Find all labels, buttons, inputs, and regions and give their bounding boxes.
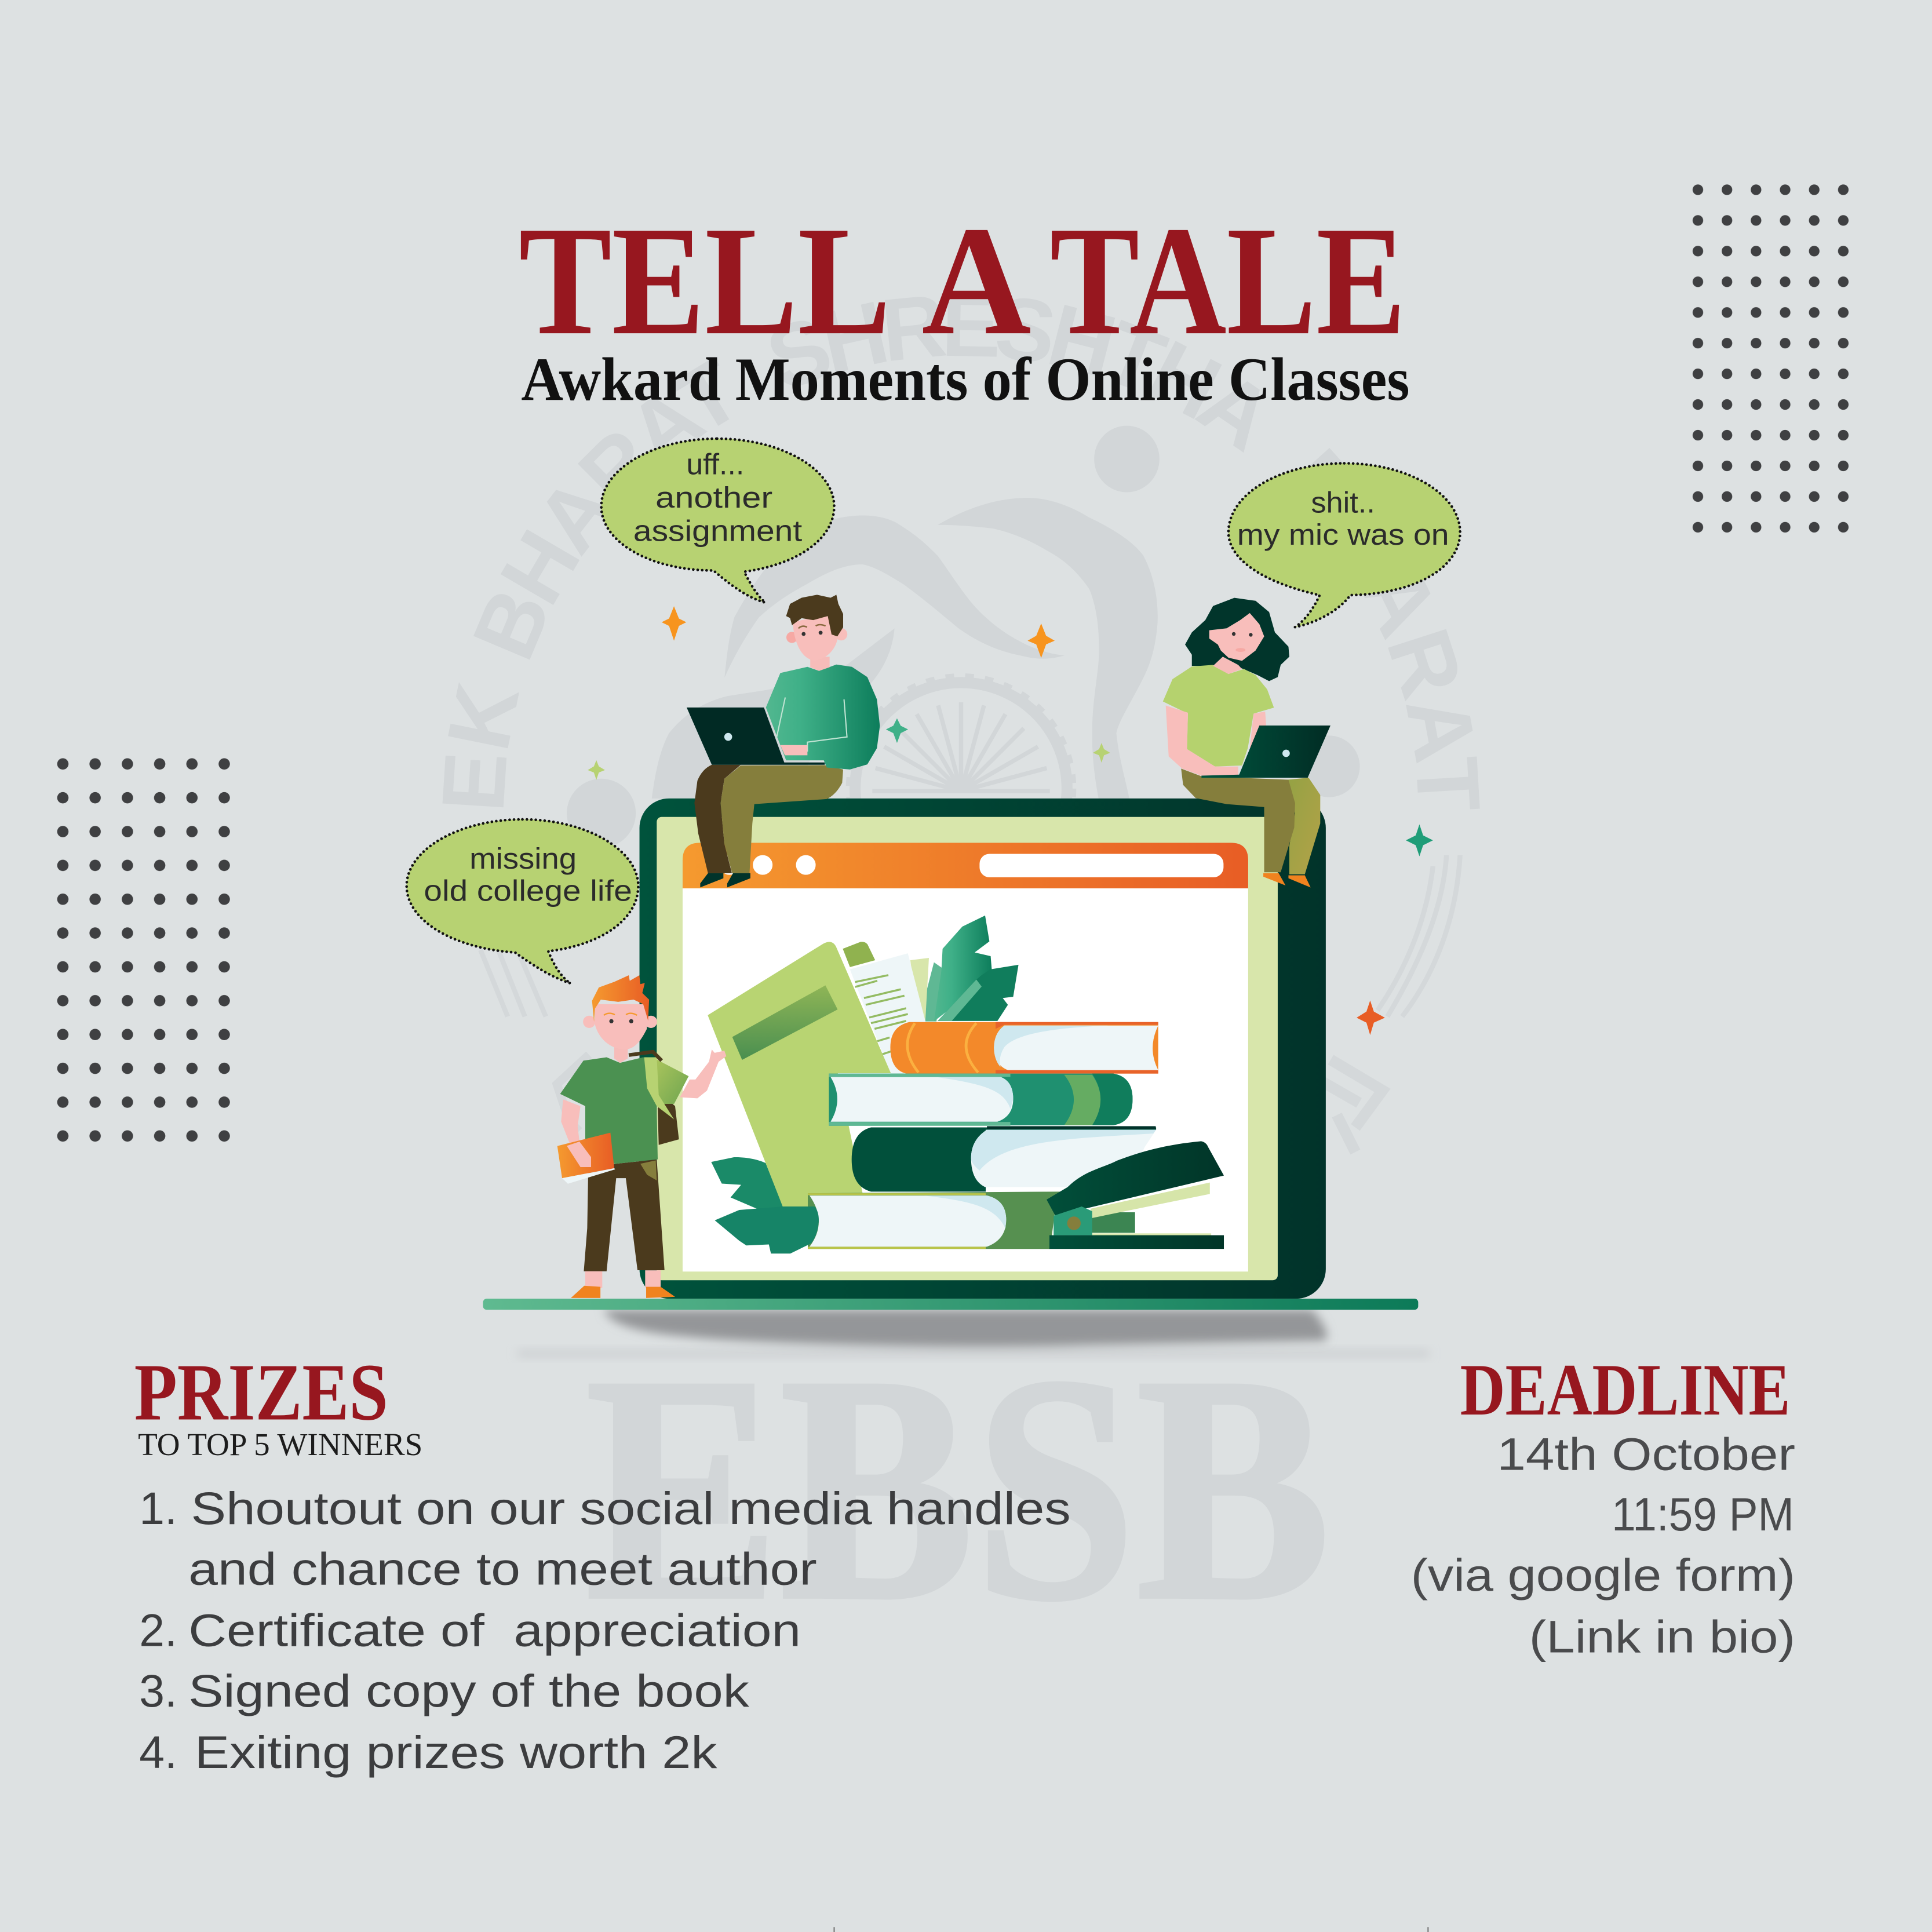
boy pants (584, 1160, 665, 1271)
deadline details: (Link in bio) (1529, 1611, 1795, 1662)
laptop / tablet screen illustration (640, 799, 1326, 1299)
back leaf at folder base (711, 1157, 787, 1216)
prizes list: 1. (139, 1483, 177, 1534)
boy strap (629, 1052, 674, 1120)
speech bubble: uff another assignment: another (655, 481, 772, 514)
prizes list: 4. (139, 1727, 177, 1778)
title: A (921, 194, 1031, 367)
deadline details: (via google form) (1411, 1550, 1795, 1601)
woman laptop (1201, 726, 1330, 778)
character: woman with laptop (1163, 598, 1330, 888)
man sweater (766, 665, 880, 770)
boy face and hair (583, 975, 657, 1063)
character: man with laptop (687, 595, 880, 887)
woman face (1209, 613, 1264, 674)
watermark figure (567, 426, 1360, 848)
speech bubble: uff another assignment: uff... (686, 448, 744, 481)
prizes heading: PRIZES (134, 1347, 388, 1437)
teal book (829, 1074, 1132, 1126)
subtitle: Awkard Moments of Online Classes (521, 345, 1409, 413)
sparkle stars (588, 606, 1433, 1035)
deadline details (1411, 1429, 1795, 1662)
man sweater seams (777, 697, 847, 752)
boy book (557, 1133, 615, 1184)
watermark ring text: BHARAT (474, 357, 729, 659)
title: TALE (1050, 194, 1406, 367)
deadline details: 11:59 PM (1612, 1489, 1794, 1541)
orange book (890, 1022, 1158, 1074)
woman legs (1181, 768, 1320, 888)
title (519, 194, 1406, 367)
boy bag (658, 1096, 679, 1145)
prizes list: Signed copy of the book (188, 1665, 750, 1716)
dark book (852, 1126, 1156, 1191)
man neck and face (786, 595, 847, 671)
watermark: Ek Bharat Shreshtha Bharat emblem (443, 297, 1480, 1154)
watermark chakra (849, 676, 1073, 901)
prizes subheading: TO TOP 5 WINNERS (138, 1427, 422, 1462)
man laptop (687, 708, 825, 765)
browser window (683, 843, 1248, 1271)
watermark ring text: EK (443, 683, 519, 807)
boy shoes and ankles (571, 1270, 675, 1298)
prizes list: Shoutout on our social media handles (191, 1483, 1071, 1534)
watermark ring text: BHARAT (1310, 448, 1480, 809)
decorative dot grid: top right (1683, 174, 1858, 542)
decorative dot grid: left (47, 747, 240, 1153)
stapler (1047, 1141, 1224, 1249)
deadline heading: DEADLINE (1460, 1348, 1790, 1431)
watermark ring text: SHRESHTHA (771, 297, 1260, 453)
woman front arm (1166, 706, 1238, 775)
woman back arm (1250, 712, 1266, 748)
ground shadow (517, 1310, 1429, 1357)
boy shirt (560, 1058, 658, 1166)
prizes list: and chance to meet author (188, 1543, 817, 1594)
speech bubble: shit my mic was on: shit.. (1311, 486, 1375, 519)
watermark: EBSB letters: EBSB (585, 1310, 1330, 1667)
prizes list (139, 1483, 1071, 1778)
speech bubble: uff another assignment: assignment (633, 514, 802, 547)
prizes list: 2. (139, 1605, 177, 1656)
speech bubble: missing old college life: old college life (424, 874, 632, 907)
prizes list: Exiting prizes worth 2k (195, 1727, 717, 1778)
man legs (694, 765, 843, 887)
speech bubble: uff another assignment (602, 439, 834, 603)
woman hair (1185, 598, 1289, 681)
man hand (781, 745, 807, 755)
paper sheet (850, 953, 929, 1074)
speech bubble: missing old college life (407, 819, 638, 983)
speech bubble: shit my mic was on: my mic was on (1237, 518, 1449, 551)
prizes list: 3. (139, 1665, 177, 1716)
front leaf (715, 1206, 819, 1253)
character: boy with backpack and book (557, 975, 726, 1298)
tablet body (640, 799, 1326, 1299)
bottom book (808, 1191, 1060, 1249)
folder (708, 942, 891, 1217)
boy olive patch (640, 1161, 657, 1180)
boy raised arm (680, 1049, 726, 1098)
leaves behind books (925, 916, 1019, 1022)
boy left arm (561, 1099, 591, 1167)
speech bubble: shit my mic was on (1229, 463, 1460, 627)
watermark ring text (443, 297, 1480, 809)
prizes list: Certificate of appreciation (188, 1605, 801, 1656)
title: TELL (519, 194, 891, 367)
ground bar (483, 1299, 1418, 1310)
watermark laurels and script (480, 855, 1460, 1152)
tablet light frame (657, 817, 1278, 1280)
speech bubble: missing old college life: missing (469, 842, 577, 875)
book stack (808, 1022, 1158, 1249)
deadline details: 14th October (1497, 1429, 1795, 1480)
boy sleeve (657, 1059, 688, 1104)
woman shirt (1163, 665, 1274, 767)
